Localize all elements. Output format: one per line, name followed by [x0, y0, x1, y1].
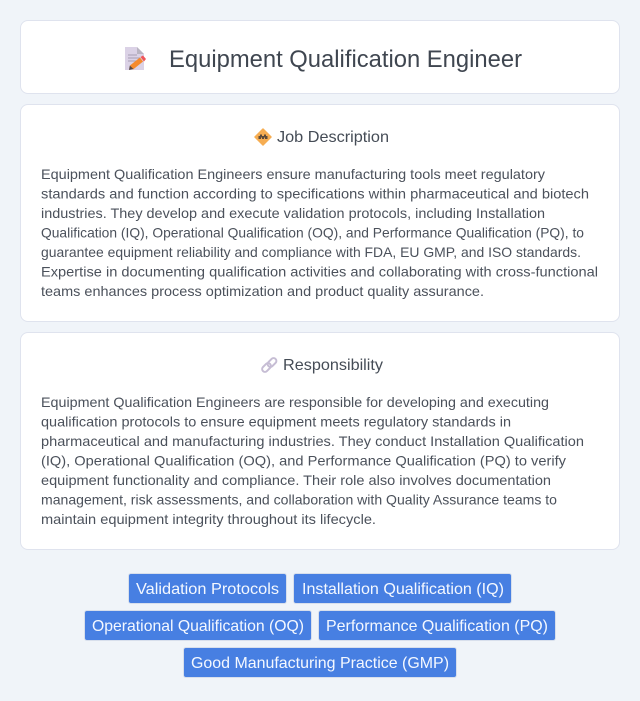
tag: installation qualification: [294, 574, 511, 603]
tag: performance qualification: [319, 611, 555, 640]
panel: title card: [20, 20, 620, 94]
text block: job description: Equipment Qualification Engineers ensure manufacturing tools meet regulatory: [41, 166, 545, 182]
tag: performance qualification: Performance Qualification (PQ): [326, 618, 548, 635]
text block: responsibility: management, risk assessments, and collaboration with Quality Assurance teams to: [41, 492, 557, 508]
tag: installation qualification: Installation Qualification (IQ): [302, 581, 504, 598]
text block: responsibility: (IQ), Operational Qualification (OQ), and Performance Qualification (PQ) to verify: [41, 452, 566, 468]
icon: chain link: [261, 357, 278, 373]
text block: job description: guarantee equipment reliability and compliance with FDA, EU GMP, and ISO standards.: [41, 244, 581, 260]
tag: validation protocols: Validation Protocols: [136, 581, 279, 598]
icon: orange diamond: [254, 128, 272, 146]
tag: good manufacturing practice: [184, 648, 456, 677]
text block: responsibility: [41, 394, 584, 527]
text block: job description: Qualification (IQ), Operational Qualification (OQ), and Performance Qualification (PQ), to: [41, 224, 584, 240]
text block: responsibility: equipment functionality and compliance. Their role also involves documentation: [41, 472, 551, 488]
text block: job description: industries. They develop and execute validation protocols, including Installation: [41, 205, 545, 221]
text block: job description: standards and function according to specifications within pharmaceutical and biotech: [41, 186, 589, 202]
panel: job description: [20, 104, 620, 322]
tag: operational qualification: Operational Qualification (OQ): [92, 618, 304, 635]
text block: responsibility: qualification protocols to ensure equipment meets regulatory standards in: [41, 414, 511, 430]
text block: job description: [41, 166, 598, 299]
text block: responsibility: maintain equipment integrity throughout its lifecycle.: [41, 511, 376, 527]
tag: validation protocols: [129, 574, 286, 603]
text block: job description: Expertise in documenting qualification activities and collaborating with cross-functional: [41, 264, 598, 280]
title: Equipment Qualification Engineer: [169, 46, 522, 73]
panel: responsibility: [20, 332, 620, 550]
tag: good manufacturing practice: Good Manufacturing Practice (GMP): [191, 655, 449, 672]
tag: operational qualification: [85, 611, 311, 640]
heading: job description: Job Description: [277, 129, 389, 146]
text block: responsibility: pharmaceutical and manufacturing industries. They conduct Installation Qualification: [41, 433, 584, 449]
text block: responsibility: Equipment Qualification Engineers are responsible for developing and executing: [41, 394, 549, 410]
heading: responsibility: Responsibility: [283, 357, 383, 374]
text block: job description: teams enhances process optimization and product quality assurance.: [41, 283, 484, 299]
icon: document with pencil: [125, 47, 146, 70]
